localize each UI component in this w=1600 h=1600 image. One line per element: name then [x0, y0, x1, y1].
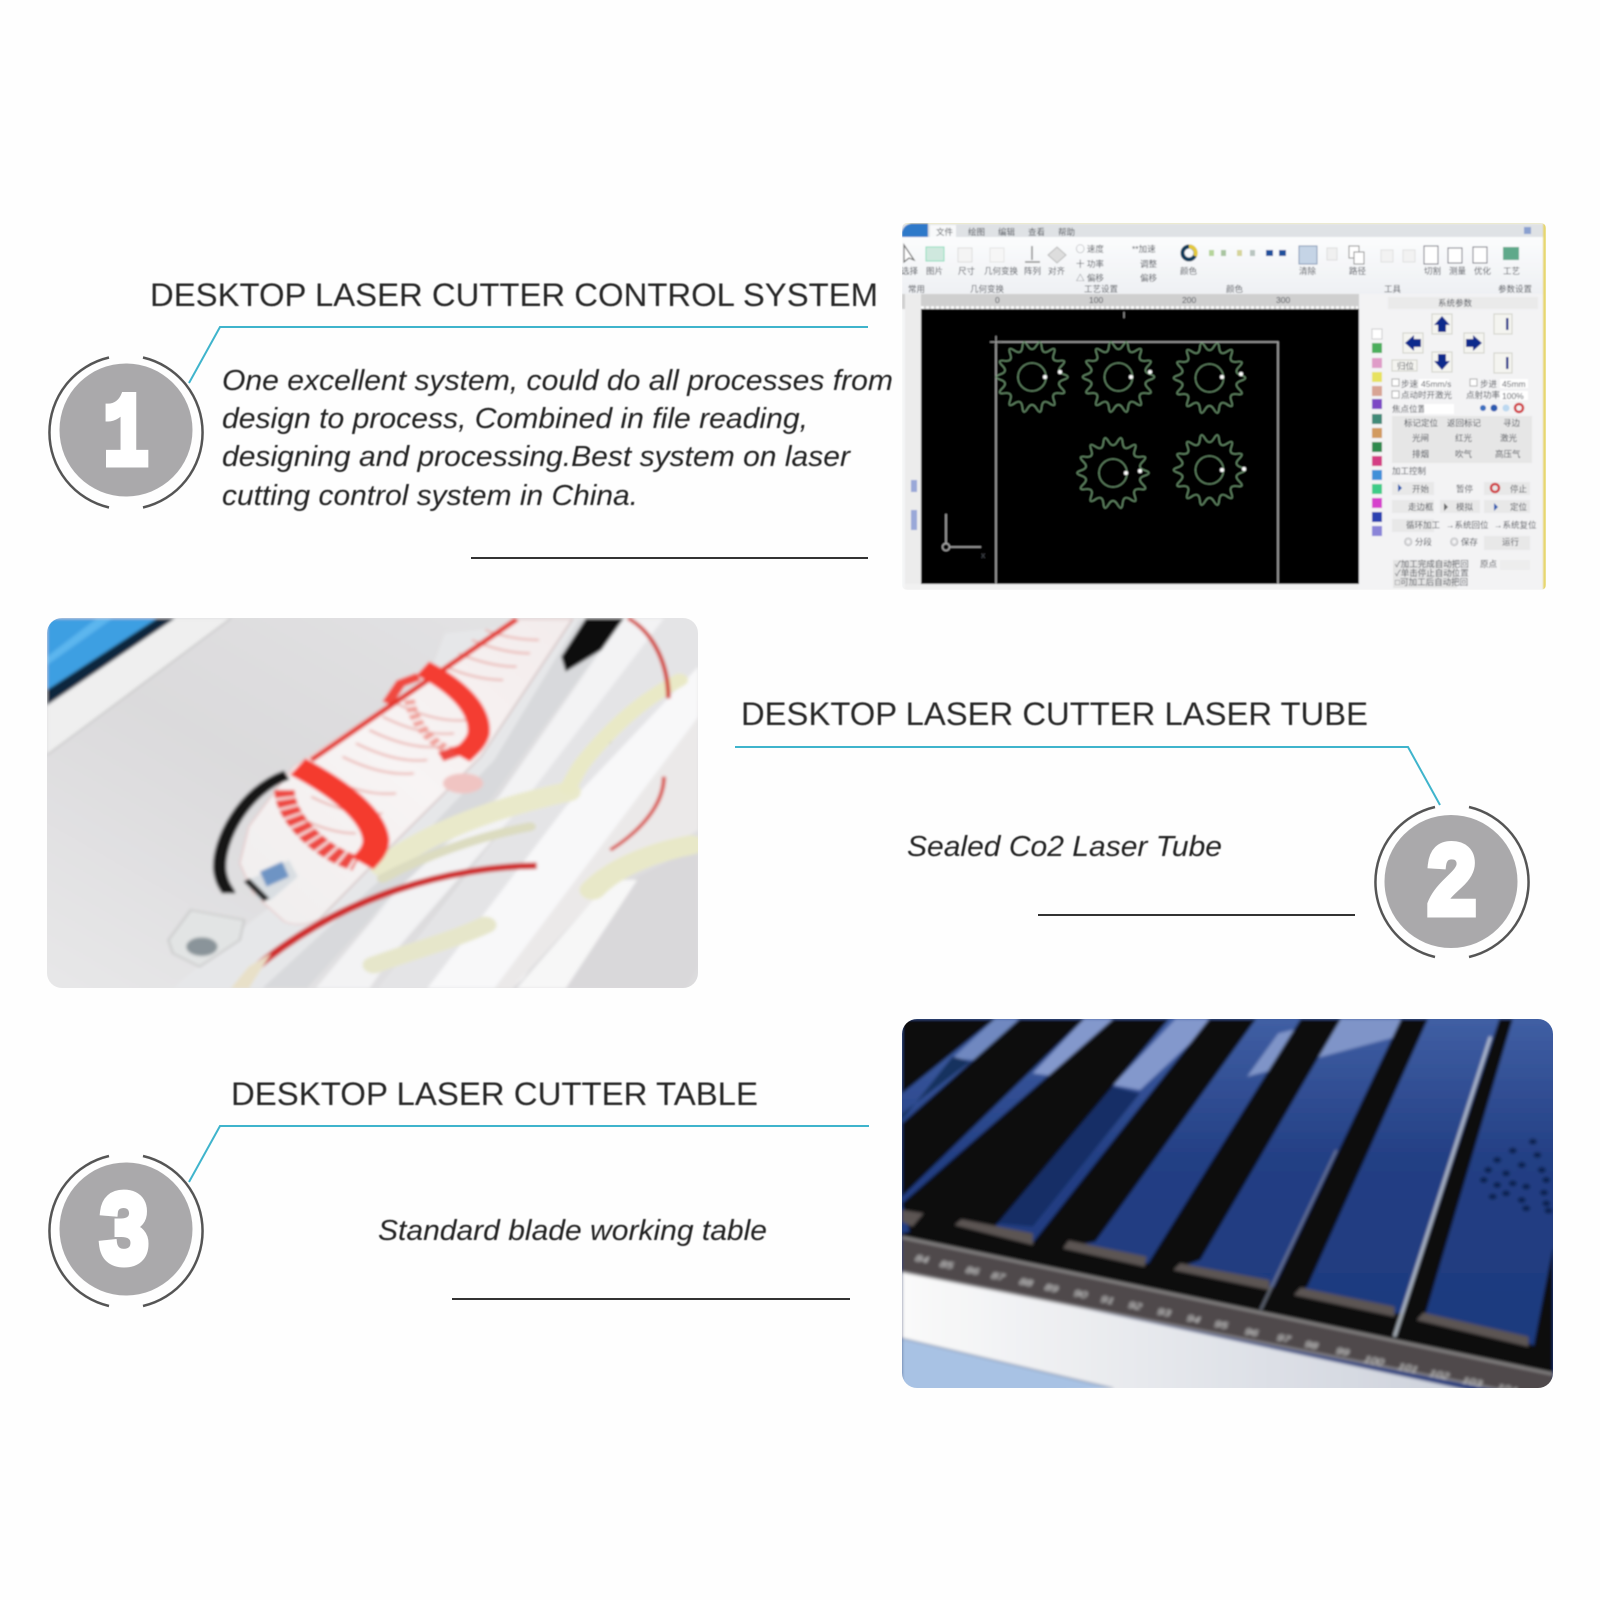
panel controls: 激光	[1500, 433, 1518, 443]
steel ruler: 85	[938, 1259, 955, 1271]
panel controls: 点射功率:	[1466, 390, 1502, 400]
rulers: 100	[1089, 295, 1103, 305]
panel controls: ◎ 保存	[1450, 537, 1478, 547]
window tab bar	[902, 223, 1544, 238]
ribbon toolbar	[901, 237, 1544, 295]
ribbon toolbar: 工艺设置	[1084, 284, 1119, 294]
section 1: control system	[49, 277, 893, 558]
description text: One excellent system, could do all processes from	[222, 365, 893, 397]
ribbon toolbar: ◯ 速度	[1076, 244, 1104, 254]
panel controls: 红光	[1455, 433, 1473, 443]
steel ruler: 86	[964, 1265, 981, 1277]
panel controls: 返回标记	[1447, 418, 1482, 428]
ribbon toolbar: 偏移	[1140, 273, 1158, 283]
panel controls: 暂停	[1456, 484, 1474, 494]
panel controls: 100%	[1502, 391, 1524, 401]
ribbon toolbar: 常用	[908, 284, 925, 294]
ribbon toolbar: 几何变换	[970, 284, 1005, 294]
panel controls: 标记定位	[1404, 418, 1439, 428]
black blades	[902, 1019, 1553, 1375]
right control panel: 归位	[1397, 361, 1415, 371]
rulers	[902, 294, 1360, 590]
teal leader line	[189, 1126, 869, 1182]
ribbon toolbar: 优化	[1474, 266, 1492, 276]
black rule	[1038, 914, 1355, 916]
ribbon toolbar: 测量	[1449, 266, 1467, 276]
panel controls: 开始	[1412, 484, 1430, 494]
panel controls: 45mm/s	[1421, 379, 1451, 389]
ribbon toolbar: 颜色	[1226, 284, 1244, 294]
panel controls: 光闸	[1412, 433, 1429, 443]
panel controls: 运行	[1502, 537, 1520, 547]
teal leader line	[189, 327, 868, 383]
ribbon toolbar: 图片	[926, 266, 943, 276]
panel controls: 定位	[1510, 502, 1528, 512]
description text: Standard blade working table	[378, 1215, 767, 1247]
steel ruler: 100	[1362, 1354, 1385, 1368]
canvas with gears	[921, 309, 1359, 590]
ribbon toolbar: 工艺	[1503, 266, 1520, 276]
number badge 3: 3	[98, 1177, 150, 1295]
panel controls: 45mm	[1502, 379, 1526, 389]
canvas with gears: x	[981, 550, 986, 560]
ribbon toolbar: 几何变换	[984, 266, 1019, 276]
blue machine corner	[47, 618, 231, 755]
section 3: working table	[49, 1000, 1590, 1400]
perforated dots	[1480, 1139, 1553, 1214]
blade highlights	[1261, 1037, 1490, 1337]
heading: table: DESKTOP LASER CUTTER TABLE	[231, 1076, 758, 1112]
right control panel	[1359, 294, 1544, 590]
steel ruler: 92	[1127, 1300, 1143, 1312]
ribbon toolbar: 十 功率	[1076, 259, 1104, 269]
steel ruler: 103	[1461, 1376, 1484, 1389]
ribbon toolbar: △ 偏移	[1076, 273, 1104, 283]
steel ruler: 88	[1018, 1277, 1034, 1289]
jog arrows	[1392, 314, 1512, 373]
panel controls: ✓加工完成自动把回	[1395, 559, 1469, 569]
red straps and wires	[220, 618, 668, 972]
rulers: 200	[1182, 295, 1196, 305]
steel ruler: 104	[1495, 1383, 1518, 1396]
steel ruler: 89	[1043, 1282, 1060, 1295]
panel controls: 吹气	[1455, 449, 1473, 459]
panel controls: 模拟	[1456, 502, 1474, 512]
panel controls: →系统复位	[1494, 520, 1537, 530]
window tab bar: 查看	[1028, 227, 1045, 237]
steel ruler: 94	[1185, 1313, 1202, 1326]
ribbon toolbar: 颜色	[1180, 266, 1198, 276]
right control panel: 系统参数	[1438, 298, 1473, 308]
panel controls: 点动时开激光	[1401, 390, 1453, 400]
rulers: 0	[995, 295, 1000, 305]
panel controls: 高压气	[1495, 449, 1521, 459]
blade end tabs	[902, 1210, 1528, 1347]
description text: cutting control system in China.	[222, 480, 638, 512]
panel controls: 循环加工	[1406, 520, 1441, 530]
ribbon toolbar: 路径	[1349, 266, 1367, 276]
number badge 1: 1	[103, 378, 149, 496]
colour swatches	[1372, 329, 1382, 536]
panel controls: 焦点位置:	[1392, 404, 1428, 414]
number badge 3	[49, 1156, 203, 1306]
steel ruler: 93	[1156, 1307, 1172, 1319]
description text: design to process, Combined in file reading,	[222, 403, 808, 435]
steel ruler	[902, 1237, 1553, 1400]
steel ruler: 87	[990, 1271, 1007, 1283]
number badge 2: 2	[1425, 828, 1478, 946]
yellow window edge	[902, 222, 1546, 590]
panel controls: 加工控制	[1392, 466, 1426, 476]
steel ruler: 99	[1334, 1346, 1351, 1358]
panel controls: □可加工后自动把回	[1395, 577, 1468, 587]
steel ruler: 101	[1396, 1362, 1419, 1375]
number badge 1	[49, 358, 203, 508]
number badge 2	[1375, 807, 1529, 957]
screenshot: control software	[901, 222, 1546, 590]
ribbon toolbar: 对齐	[1048, 266, 1066, 276]
steel ruler: 91	[1099, 1294, 1115, 1307]
ribbon toolbar: 选择	[901, 266, 919, 276]
panel controls: 走边框	[1408, 502, 1434, 512]
steel ruler: 96	[1243, 1327, 1260, 1339]
ribbon toolbar: 工具	[1384, 284, 1402, 294]
window tab bar: 编辑	[998, 227, 1016, 237]
lens and end cap	[168, 860, 298, 988]
panel controls: 步进	[1480, 379, 1498, 389]
panel controls: →系统回位	[1446, 520, 1489, 530]
description text: designing and processing.Best system on laser	[222, 441, 851, 473]
panel controls: 排烟	[1412, 449, 1429, 459]
ribbon toolbar: **加速	[1132, 244, 1156, 254]
panel controls: 停止	[1510, 484, 1528, 494]
panel controls: 寻边	[1503, 418, 1521, 428]
black rule	[452, 1298, 850, 1300]
beige water hoses	[374, 680, 691, 965]
photo: blade working table	[902, 1019, 1553, 1388]
steel ruler: 84	[914, 1253, 930, 1266]
photo: laser tube	[47, 618, 698, 988]
description text	[222, 365, 893, 512]
heading: laser tube: DESKTOP LASER CUTTER LASER TUBE	[741, 696, 1368, 732]
description text: Sealed Co2 Laser Tube	[907, 831, 1222, 863]
panel controls: 步速	[1401, 379, 1419, 389]
panel controls: 原点	[1480, 559, 1498, 569]
panel controls	[1392, 379, 1537, 588]
section 2: laser tube	[30, 600, 1529, 1000]
ribbon toolbar: 切割	[1424, 266, 1441, 276]
ribbon toolbar: 调整	[1140, 259, 1158, 269]
panel controls: ◎ 分段	[1404, 537, 1432, 547]
ribbon toolbar: 清除	[1299, 266, 1317, 276]
ribbon toolbar: 参数设置	[1498, 284, 1533, 294]
steel ruler: 95	[1213, 1319, 1229, 1331]
white frame below ruler	[902, 1270, 1472, 1388]
heading: control system: DESKTOP LASER CUTTER CONTROL SYSTEM	[150, 277, 878, 313]
steel ruler: 90	[1072, 1288, 1089, 1301]
ribbon toolbar: 尺寸	[958, 266, 976, 276]
window tab bar: 帮助	[1058, 227, 1075, 237]
steel ruler: 97	[1275, 1333, 1293, 1345]
black rule	[471, 557, 868, 559]
panel controls: ✓单击停止自动位置	[1395, 568, 1469, 578]
teal leader line	[735, 747, 1440, 805]
steel ruler: 98	[1303, 1339, 1320, 1352]
rails and channel	[268, 618, 698, 988]
window tab bar: 文件	[936, 227, 954, 237]
sky reflections	[902, 1019, 1403, 1227]
steel ruler: 102	[1428, 1368, 1451, 1382]
ribbon toolbar: 阵列	[1024, 266, 1041, 276]
glass tube	[240, 619, 572, 924]
window tab bar: 绘图	[968, 227, 985, 237]
rulers: 300	[1276, 295, 1290, 305]
